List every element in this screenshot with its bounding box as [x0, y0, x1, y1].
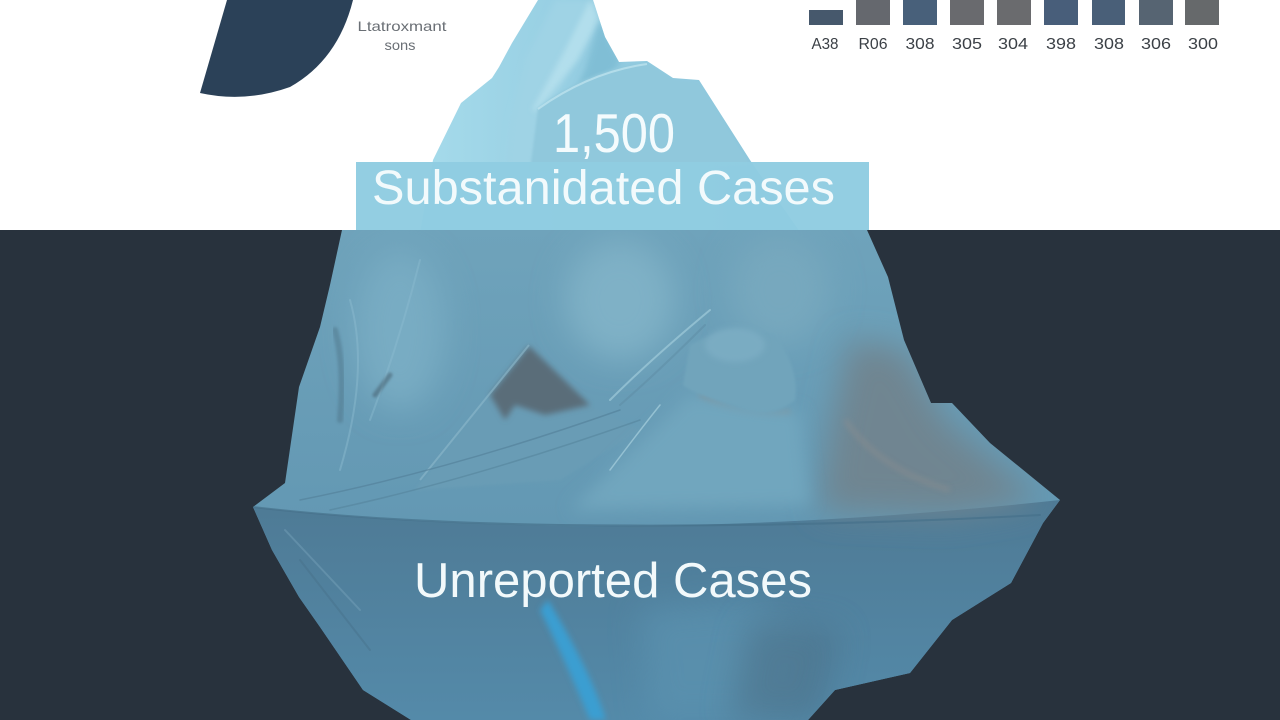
iceberg above water	[432, 0, 752, 162]
small caption beside logo shape: sons	[384, 37, 416, 53]
bar chart top right: R06	[858, 36, 888, 53]
dark small peak	[490, 346, 590, 420]
figure: 1,500: 1,500	[553, 102, 675, 164]
central light mass	[586, 396, 808, 508]
label: substantiated cases: Substanidated Cases	[372, 162, 835, 215]
bar chart top right: 306	[1141, 36, 1171, 53]
dark quarter-circle logo shape	[200, 0, 353, 97]
bar chart top right: 398	[1046, 36, 1076, 53]
translucent label band	[356, 162, 869, 230]
bar chart top right: 308	[1094, 36, 1124, 53]
small caption beside logo shape: Ltatroxmant	[358, 18, 447, 34]
grey-brown right flank	[820, 340, 1040, 515]
mountain slope beneath dark peak	[415, 345, 640, 490]
white sky background	[0, 0, 1280, 230]
bar chart top right: 300	[1188, 36, 1218, 53]
iceberg below water	[240, 230, 1060, 720]
lower mass under ridge line	[240, 500, 1060, 720]
ice streak strokes	[253, 260, 1040, 650]
bar chart top right	[809, 0, 1219, 53]
bar chart top right: 304	[998, 36, 1028, 53]
bright blue streak	[540, 600, 606, 720]
dark water panel	[0, 230, 1280, 720]
darker lower center and right	[654, 610, 752, 678]
rounded lump	[686, 354, 794, 401]
bar chart top right: A38	[812, 36, 839, 53]
bar chart top right: 308	[906, 36, 935, 53]
bar chart top right: 305	[952, 36, 982, 53]
small caption beside logo shape	[358, 18, 447, 53]
label: unreported cases: Unreported Cases	[414, 554, 812, 608]
